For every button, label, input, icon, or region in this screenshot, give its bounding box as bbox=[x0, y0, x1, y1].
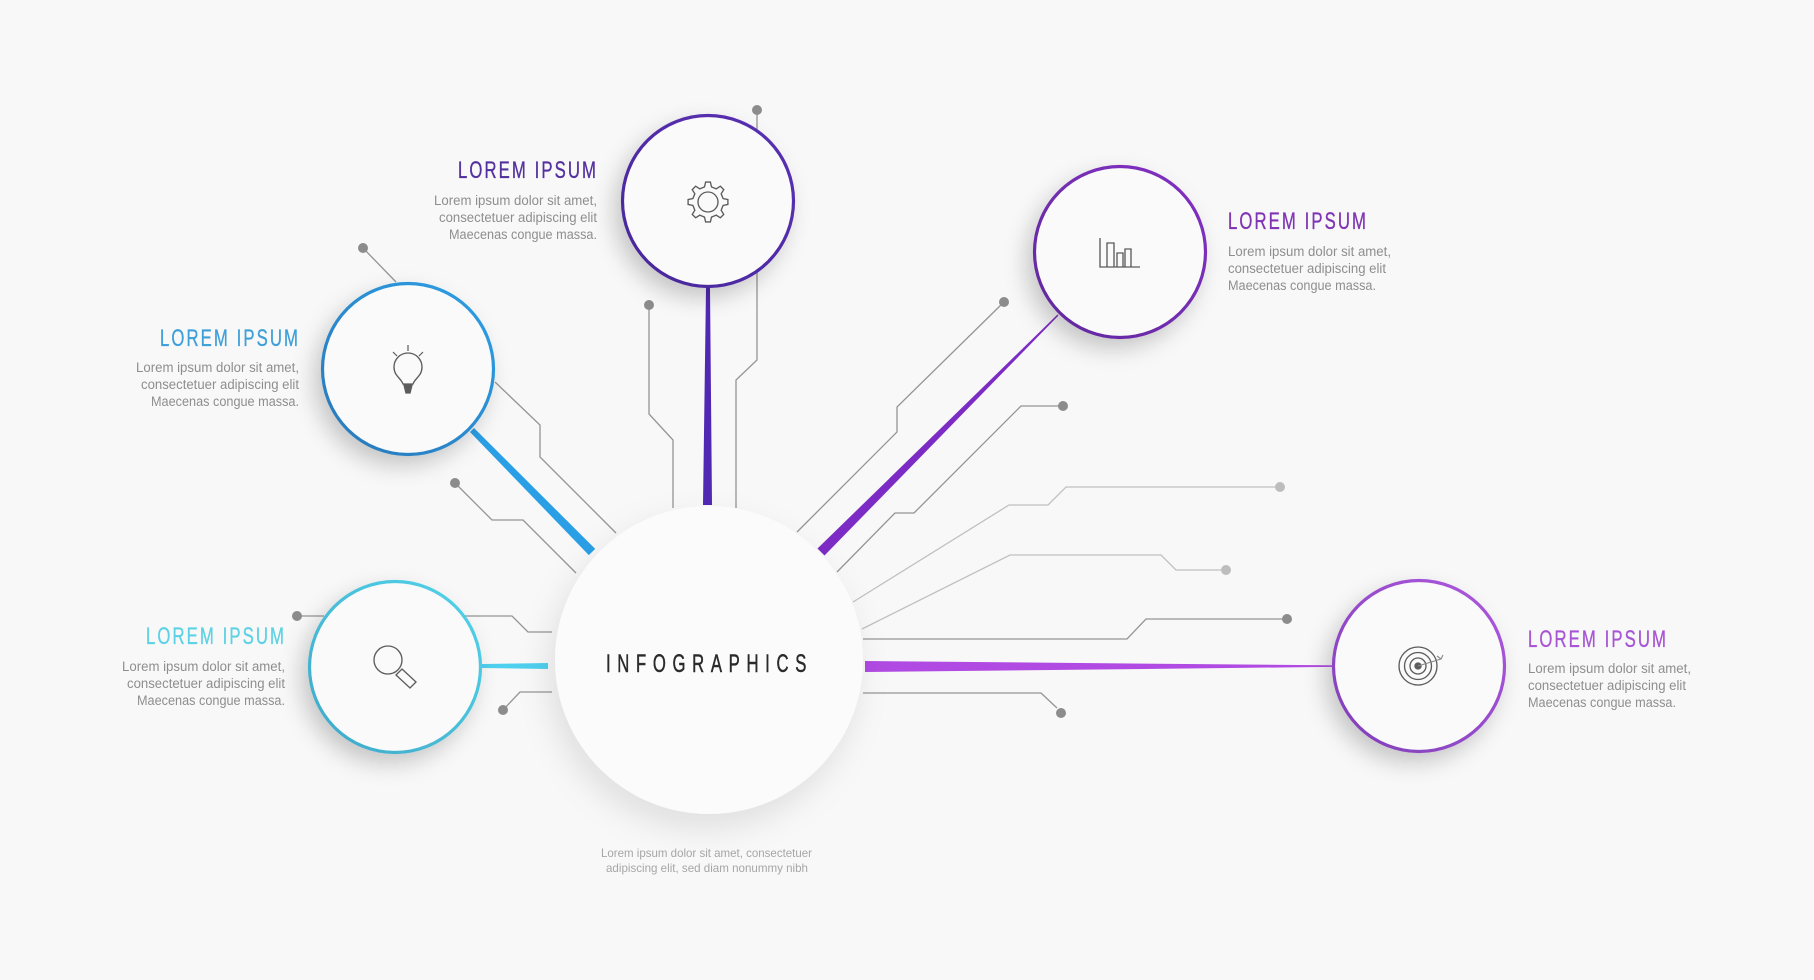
connector: upper right dot line bbox=[863, 614, 1292, 639]
label: bulb: LOREM IPSUM bbox=[160, 325, 300, 352]
connector: chart upper dot line bbox=[797, 297, 1009, 532]
connector: long light dot line bbox=[853, 482, 1285, 602]
label: gear: Maecenas congue massa. bbox=[449, 227, 597, 242]
node: bulb bbox=[322, 284, 494, 454]
label: gear: consectetuer adipiscing elit bbox=[439, 210, 597, 225]
connector: short light dot line bbox=[862, 555, 1231, 629]
connector: search left dot line bbox=[292, 611, 324, 621]
label: search: Lorem ipsum dolor sit amet, bbox=[122, 659, 285, 674]
label: bulb bbox=[136, 325, 300, 409]
label: bulb: Maecenas congue massa. bbox=[151, 394, 299, 409]
label: search: Maecenas congue massa. bbox=[137, 693, 285, 708]
connector: gear left dot line bbox=[644, 300, 673, 508]
icon: gear bbox=[688, 182, 728, 222]
label: search: consectetuer adipiscing elit bbox=[127, 676, 285, 691]
label: target: Maecenas congue massa. bbox=[1528, 695, 1676, 710]
node: target bbox=[1334, 580, 1504, 752]
main spoke: search bbox=[482, 663, 548, 669]
label: target: Lorem ipsum dolor sit amet, bbox=[1528, 661, 1691, 676]
central title: INFOGRAPHICS bbox=[606, 650, 813, 678]
node: search bbox=[310, 582, 480, 752]
label: chart: consectetuer adipiscing elit bbox=[1228, 261, 1386, 276]
central caption bbox=[601, 846, 812, 875]
connector: chart lower dot line bbox=[837, 401, 1068, 572]
label: chart: Lorem ipsum dolor sit amet, bbox=[1228, 244, 1391, 259]
label: chart bbox=[1228, 208, 1391, 293]
central caption: Lorem ipsum dolor sit amet, consectetuer bbox=[601, 846, 812, 860]
label: chart: Maecenas congue massa. bbox=[1228, 278, 1376, 293]
connector: search lower dot line bbox=[498, 692, 552, 715]
main spoke: bulb bbox=[470, 428, 595, 555]
label: gear: Lorem ipsum dolor sit amet, bbox=[434, 193, 597, 208]
label: bulb: Lorem ipsum dolor sit amet, bbox=[136, 360, 299, 375]
icon: bar chart bbox=[1100, 238, 1140, 267]
central caption: adipiscing elit, sed diam nonummy nibh bbox=[606, 861, 808, 875]
label: gear: LOREM IPSUM bbox=[458, 157, 598, 184]
icon: light bulb bbox=[393, 345, 423, 393]
label: target: consectetuer adipiscing elit bbox=[1528, 678, 1686, 693]
icon: magnifier bbox=[374, 646, 416, 688]
label: target: LOREM IPSUM bbox=[1528, 626, 1668, 653]
label: search bbox=[122, 623, 286, 708]
connector: gear top dot line bbox=[736, 105, 762, 508]
icon: target bbox=[1399, 647, 1443, 685]
node: chart bbox=[1034, 166, 1206, 338]
connector: bulb lower dot line bbox=[450, 478, 576, 573]
label: chart: LOREM IPSUM bbox=[1228, 208, 1368, 235]
label: search: LOREM IPSUM bbox=[146, 623, 286, 650]
connector: bulb top dot line bbox=[358, 243, 396, 282]
main spoke: gear bbox=[703, 288, 712, 505]
connector: search right line bbox=[465, 616, 552, 632]
node: gear bbox=[622, 116, 794, 286]
label: target bbox=[1528, 626, 1691, 710]
main spoke: chart bbox=[818, 314, 1058, 556]
connector: lower right dot line bbox=[863, 693, 1066, 718]
main spoke: target bbox=[865, 661, 1340, 672]
label: gear bbox=[434, 157, 598, 242]
label: bulb: consectetuer adipiscing elit bbox=[141, 377, 299, 392]
central circle bbox=[555, 506, 863, 814]
connector: bulb right line bbox=[495, 382, 616, 533]
